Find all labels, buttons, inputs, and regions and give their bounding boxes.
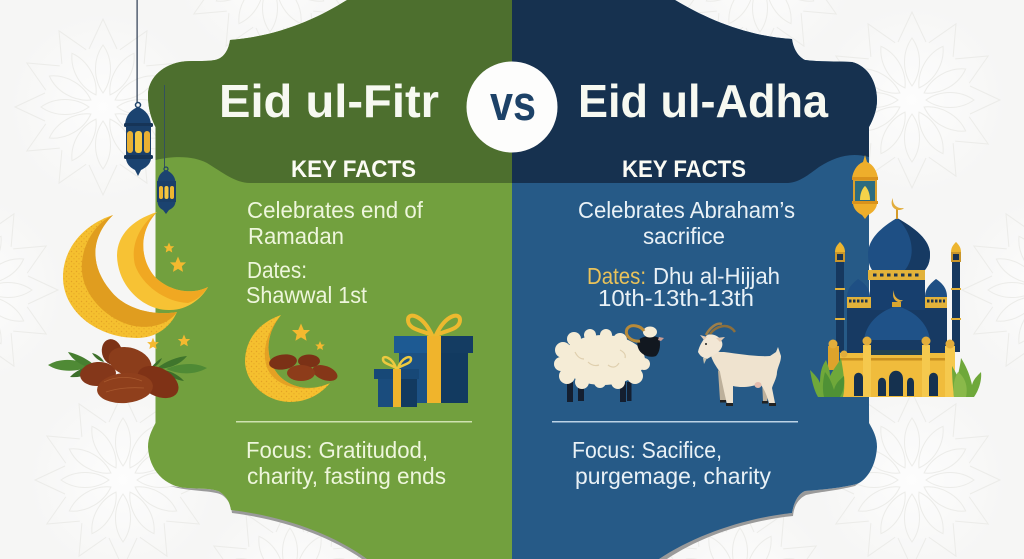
text: Fitr focus: charity, fasting ends [247, 463, 446, 489]
title: Eid ul-Adha: Eid ul-Adha [578, 75, 828, 127]
text: Fitr dates: Dates: [247, 257, 307, 283]
text: Adha dates: 10th-13th-13th [598, 285, 754, 311]
icon: mosque [810, 198, 981, 397]
divider left [236, 421, 472, 422]
text: Adha dates: Dates: [587, 263, 646, 289]
panel shadow left [170, 486, 372, 559]
text: Adha celebrates: sacrifice [643, 223, 725, 249]
panel shadow right [655, 483, 859, 559]
panel: Eid ul-Fitr (green) [140, 0, 512, 559]
icon: dates with leaves [48, 337, 207, 405]
header band: navy [512, 0, 882, 183]
icon: hanging lantern large [124, 0, 153, 176]
icon: crescent with dates [245, 315, 340, 402]
icon: gift boxes [374, 316, 473, 407]
text: Adha focus: purgemage, charity [575, 463, 771, 489]
heading: key facts left: KEY FACTS [291, 156, 416, 183]
main body [847, 305, 947, 355]
icon: sheep [554, 326, 664, 402]
lower dome and crescent [864, 306, 930, 340]
vs badge: vs [490, 77, 536, 131]
icon: goat [698, 324, 781, 406]
icon: golden crescent moons [63, 212, 208, 338]
text: Adha celebrates: Celebrates Abraham’s [578, 197, 795, 223]
text: Adha focus: Focus: Sacifice, [572, 437, 722, 463]
yellow facade [828, 336, 955, 397]
icon: hanging gold lantern [852, 155, 878, 219]
text: Fitr dates: Shawwal 1st [246, 282, 368, 308]
text: Fitr focus: Focus: Gratitudod, [246, 437, 428, 463]
minarets [835, 242, 961, 352]
main dome [868, 198, 930, 310]
header band: green [140, 0, 512, 183]
arches [854, 371, 938, 396]
title: Eid ul-Fitr: Eid ul-Fitr [219, 75, 439, 127]
text: Fitr celebrates: Celebrates end of [247, 197, 424, 223]
icon: hanging lantern small [157, 85, 176, 214]
side domes [847, 279, 870, 297]
divider right [552, 421, 798, 422]
vs badge [466, 62, 558, 152]
panel: Eid ul-Adha (blue) [512, 0, 882, 559]
text: Fitr celebrates: Ramadan [248, 223, 344, 249]
grass [810, 358, 981, 397]
heading: key facts right: KEY FACTS [622, 156, 746, 183]
text: Adha dates: Dhu al-Hijjah [653, 263, 780, 289]
icon: stars [147, 242, 190, 349]
